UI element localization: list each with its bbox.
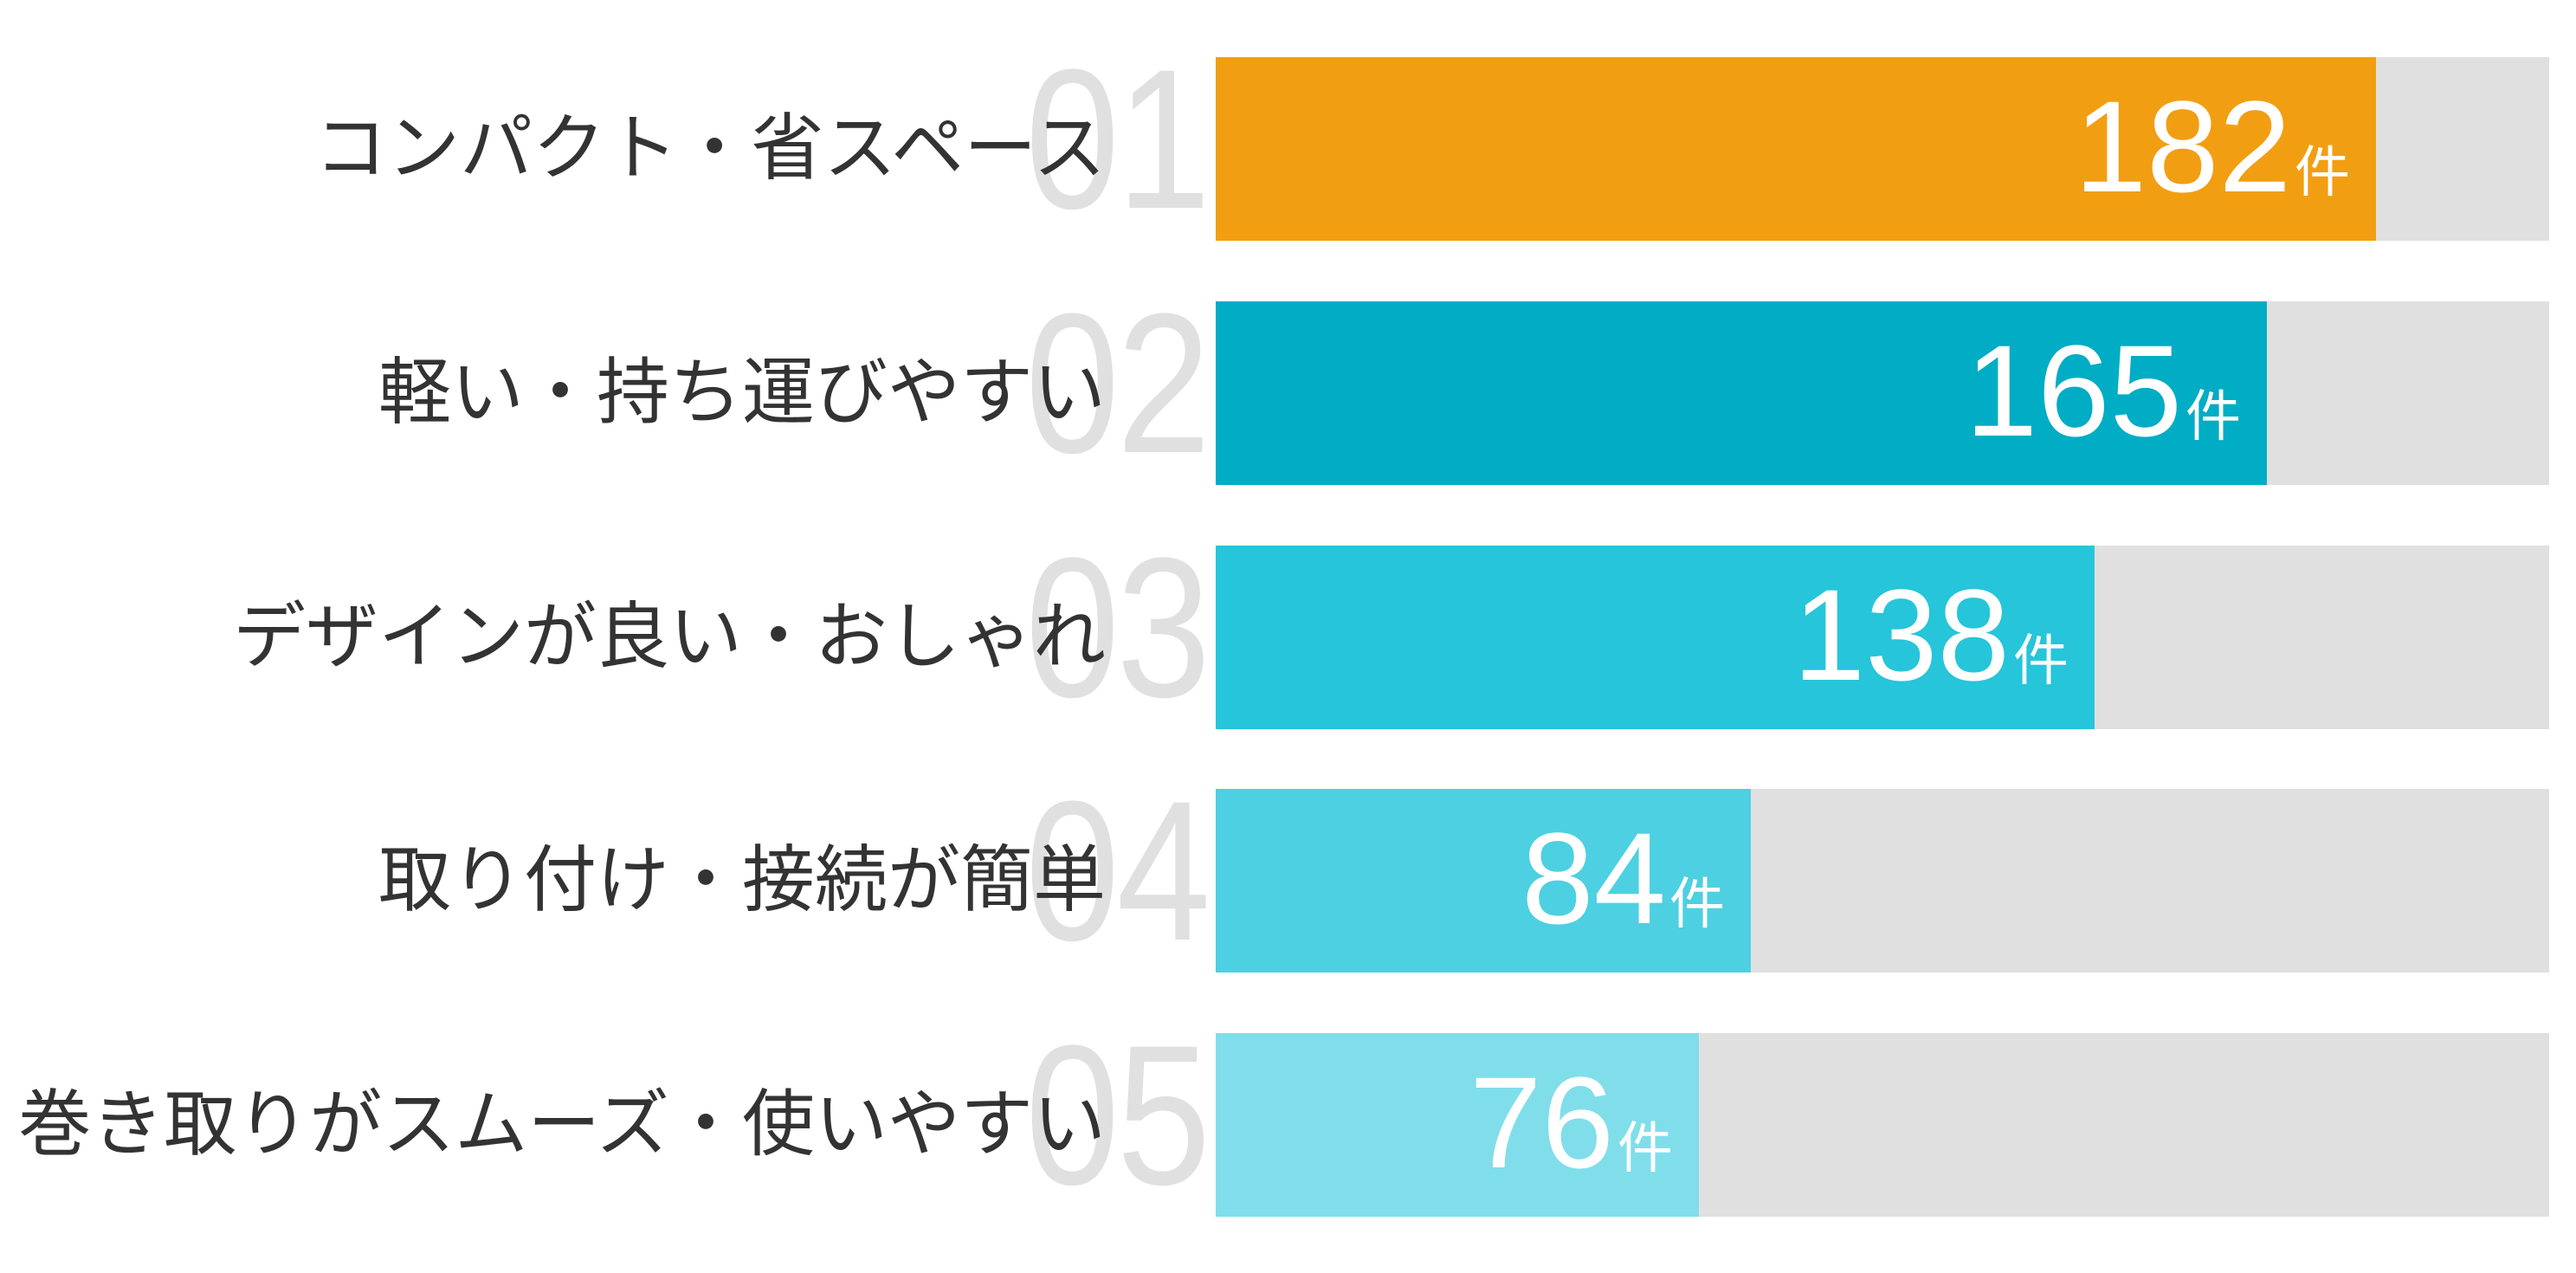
rank number 03: 03	[1025, 516, 1208, 739]
label 3: デザインが良い・おしゃれ	[233, 596, 1106, 677]
bar 2	[1216, 301, 2549, 485]
row 4	[378, 759, 2549, 982]
rank number 04: 04	[1025, 759, 1208, 982]
bar 5	[1216, 1033, 2549, 1217]
bar 1: 182件	[2075, 74, 2350, 219]
row 3	[233, 516, 2549, 739]
bar 1	[1216, 57, 2549, 241]
row 1	[314, 28, 2549, 250]
label 2: 軽い・持ち運びやすい	[378, 352, 1106, 433]
rank number 01: 01	[1025, 28, 1208, 250]
label 5: 巻き取りがスムーズ・使いやすい	[18, 1083, 1106, 1165]
bar 3	[1216, 546, 2549, 729]
row 2	[378, 272, 2549, 494]
rank number 05: 05	[1025, 1004, 1208, 1226]
bar 4	[1216, 789, 2549, 973]
bar 3: 138件	[1793, 562, 2069, 708]
bar 4: 84件	[1521, 805, 1725, 951]
row 5	[18, 1004, 2549, 1226]
bar 5: 76件	[1469, 1050, 1673, 1195]
rank number 02: 02	[1025, 272, 1208, 494]
label 1: コンパクト・省スペース	[314, 107, 1106, 189]
bar 2: 165件	[1966, 318, 2241, 463]
label 4: 取り付け・接続が簡単	[378, 839, 1106, 921]
